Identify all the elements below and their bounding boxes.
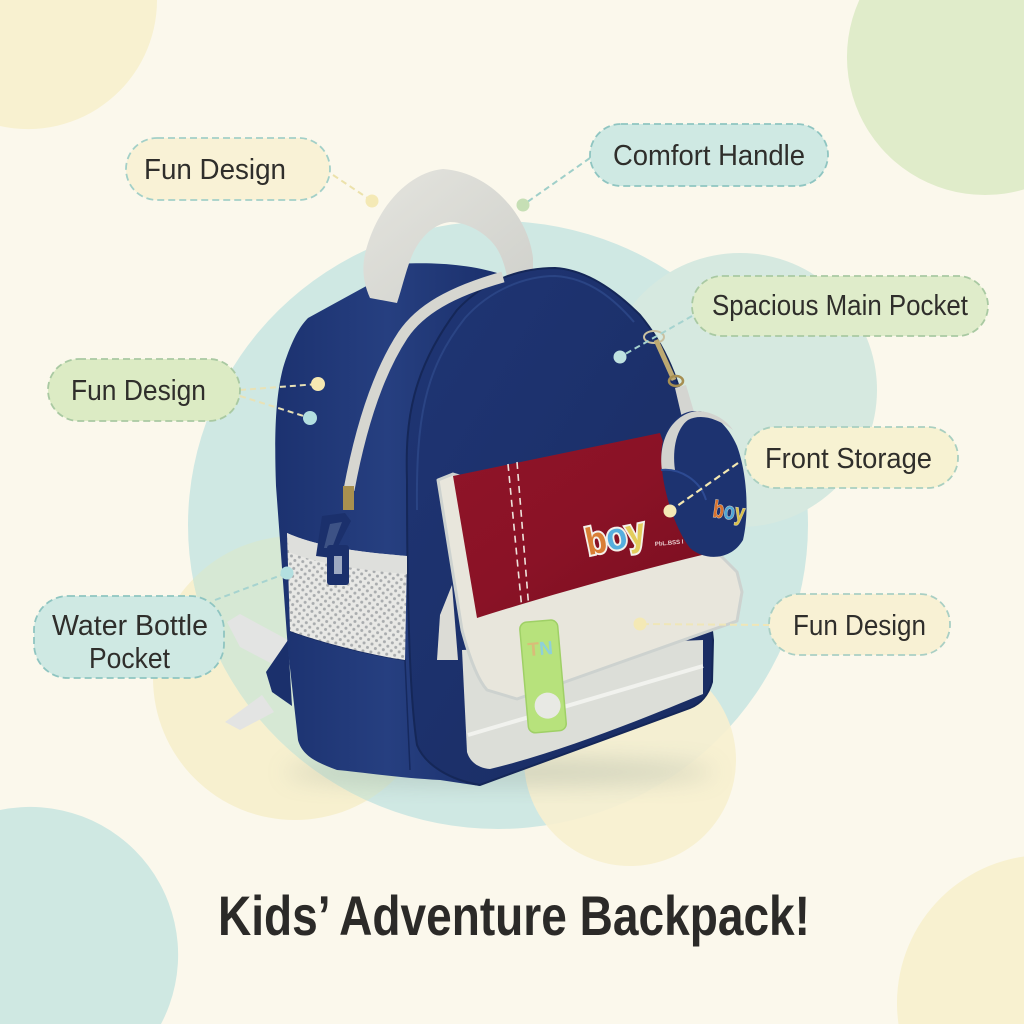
dot	[634, 618, 646, 630]
side panel seam	[290, 631, 410, 770]
title: Kids’ Adventure Backpack!	[218, 884, 810, 947]
callout: fun design (right)	[634, 594, 950, 655]
main zipper	[349, 277, 503, 490]
TN tag	[519, 619, 567, 733]
dots	[303, 377, 325, 425]
callout: fun design (left)	[48, 359, 325, 425]
label: Fun Design	[144, 154, 286, 186]
pill	[34, 596, 224, 678]
dot	[516, 198, 530, 212]
connectors	[240, 384, 318, 418]
dot	[664, 504, 676, 518]
left strap	[225, 614, 292, 730]
connector	[620, 316, 692, 357]
pouch	[661, 385, 747, 557]
small model text: PbL.BSS I	[655, 539, 684, 548]
connector	[333, 175, 372, 201]
front panel piping	[417, 276, 634, 510]
label: Fun Design	[793, 610, 926, 642]
pill	[590, 124, 828, 186]
pouch boy logo: boy	[711, 496, 747, 527]
dot	[280, 566, 294, 580]
key clip	[644, 331, 683, 386]
connector	[523, 158, 590, 205]
callout: fun design (top left)	[126, 138, 378, 208]
callout: front storage	[664, 427, 958, 518]
buckle zipper pull	[316, 486, 354, 585]
callout: comfort handle	[516, 124, 828, 212]
pill	[692, 276, 988, 336]
side panel	[275, 263, 500, 786]
side pocket sliver	[437, 585, 458, 660]
label: Pocket	[89, 643, 170, 675]
connector	[640, 624, 770, 625]
label: Comfort Handle	[613, 140, 805, 172]
dot	[366, 194, 378, 208]
TN tag: TN	[527, 638, 554, 661]
pill	[769, 594, 950, 655]
pill	[745, 427, 958, 488]
front panel	[407, 268, 713, 785]
label: Fun Design	[71, 375, 206, 407]
flap	[438, 474, 742, 699]
handle	[363, 169, 533, 303]
dot	[614, 350, 626, 364]
label: Water Bottle	[52, 610, 208, 642]
lower cream pocket	[462, 640, 703, 769]
stitching	[508, 462, 529, 610]
label: Front Storage	[765, 443, 932, 475]
callout: water bottle pocket	[34, 566, 294, 678]
boy sticker: boy	[582, 510, 649, 564]
connector	[215, 573, 287, 600]
label: Spacious Main Pocket	[712, 290, 968, 322]
connector	[670, 463, 738, 511]
mesh pocket	[287, 533, 407, 660]
backpack	[225, 169, 747, 786]
red panel	[453, 433, 702, 618]
pill	[126, 138, 330, 200]
ground shadow	[285, 760, 715, 784]
pill	[48, 359, 240, 421]
callout: spacious main pocket	[614, 276, 988, 364]
